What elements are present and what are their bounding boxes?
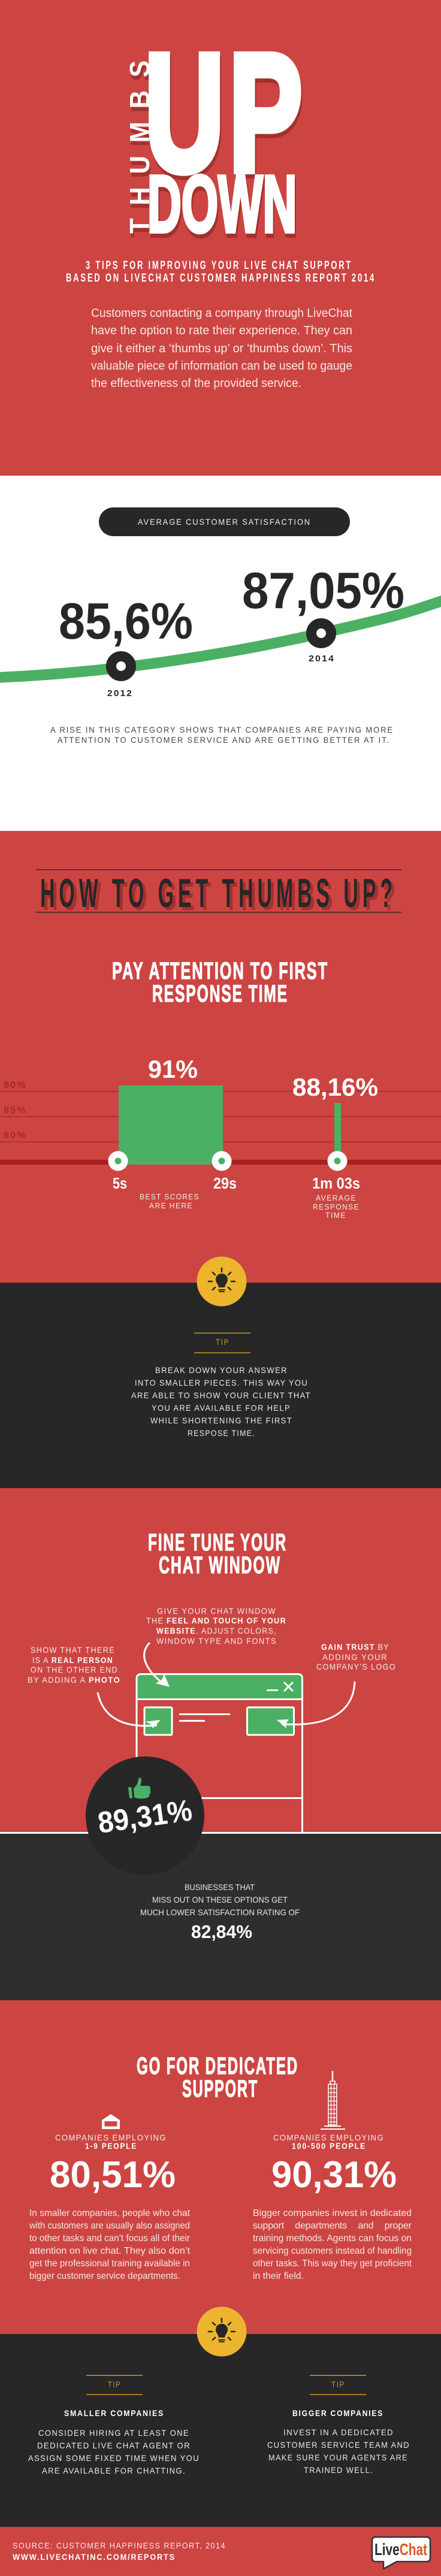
description: In smaller companies, people who chat — [29, 2208, 191, 2218]
callout: gain trust: GAIN TRUST BY — [321, 1642, 389, 1652]
tip text — [267, 2427, 410, 2475]
callout: gain trust: COMPANY’S LOGO — [316, 1662, 396, 1671]
description: bigger customer service departments. — [29, 2271, 180, 2281]
note text: BUSINESSES THAT — [185, 1882, 255, 1892]
section heading — [148, 1529, 287, 1579]
note text — [140, 1882, 300, 1917]
description — [29, 2208, 191, 2281]
note text: MISS OUT ON THESE OPTIONS GET — [152, 1895, 288, 1904]
bar: average response — [334, 1103, 341, 1158]
time labels — [113, 1174, 360, 1192]
caption: best scores: ARE HERE — [149, 1201, 193, 1210]
subtitle — [66, 259, 376, 285]
callout: feel and touch: WINDOW TYPE AND FONTS — [156, 1636, 277, 1646]
description: other tasks. This way they get proficient — [253, 2258, 412, 2269]
tip text: DEDICATED LIVE CHAT AGENT OR — [37, 2441, 191, 2450]
title: thumbs up down: UP — [145, 19, 302, 205]
tip text — [28, 2428, 200, 2475]
tip text: INTO SMALLER PIECES. THIS WAY YOU — [135, 1378, 308, 1387]
tip label: TIP — [108, 2380, 121, 2389]
panel: dedicated support — [0, 2000, 441, 2334]
title: thumbs up down: THUMBS — [124, 47, 155, 234]
column label: 1-9 PEOPLE — [85, 2141, 137, 2151]
value: 89,31% — [96, 1793, 194, 1840]
description — [253, 2208, 412, 2281]
description: training methods. Agents can focus on — [253, 2233, 412, 2244]
source text: WWW.LIVECHATINC.COM/REPORTS — [13, 2552, 176, 2562]
intro text: have the option to rate their experience. They can — [91, 324, 352, 337]
icon: thumbs up — [128, 1777, 150, 1798]
panel: fine tune chat window — [0, 1488, 441, 1833]
tip text: RESPOSE TIME. — [188, 1428, 255, 1438]
intro text — [91, 307, 352, 390]
axis scale: 90% — [4, 1080, 27, 1090]
callout: gain trust: ADDING YOUR — [322, 1652, 388, 1662]
chat window illustration — [137, 1674, 303, 1832]
bar chart — [0, 1055, 441, 1220]
tip: bigger companies — [267, 2375, 410, 2475]
callout: real person: SHOW THAT THERE — [31, 1645, 115, 1655]
caption: average response time — [313, 1193, 360, 1220]
value 82,84%: 82,84% — [191, 1921, 252, 1942]
description: servicing customers instead of handling — [253, 2246, 412, 2256]
source text — [13, 2541, 226, 2562]
description: Bigger companies invest in dedicated — [253, 2208, 412, 2218]
panel: header — [0, 0, 441, 476]
callout: feel and touch — [146, 1606, 286, 1646]
icon: skyscraper — [321, 2071, 345, 2129]
callout: feel and touch: GIVE YOUR CHAT WINDOW — [157, 1606, 276, 1616]
arrow: to photo — [98, 1692, 161, 1728]
panel: average customer satisfaction — [0, 476, 441, 831]
panel: tips for company size — [0, 2306, 441, 2527]
tip text: CUSTOMER SERVICE TEAM AND — [267, 2440, 410, 2450]
column: smaller companies — [29, 2133, 191, 2281]
tip heading: SMALLER COMPANIES — [64, 2408, 164, 2418]
value: 80,51% — [50, 2154, 176, 2196]
marker dots — [111, 1154, 344, 1168]
axis scale — [0, 1080, 441, 1165]
tip label: TIP — [216, 1337, 229, 1347]
marker 2012: 2012 — [107, 688, 133, 699]
callout: feel and touch: WEBSITE. ADJUST COLORS, — [156, 1626, 277, 1635]
caption: best scores: BEST SCORES — [140, 1192, 200, 1201]
description: with customers are usually also assigned — [29, 2221, 190, 2231]
intro text: valuable piece of information can be used to gauge — [91, 359, 352, 373]
tip text — [131, 1365, 311, 1438]
tip text: INVEST IN A DEDICATED — [283, 2427, 394, 2437]
time labels: 5s — [113, 1174, 127, 1192]
section heading: CHAT WINDOW — [159, 1552, 281, 1579]
column label — [55, 2133, 167, 2151]
callout: real person: IS A REAL PERSON — [32, 1655, 113, 1665]
value 91%: 91% — [148, 1055, 198, 1083]
callout: real person — [28, 1645, 120, 1685]
tip text: YOU ARE AVAILABLE FOR HELP — [152, 1403, 291, 1413]
tip text: CONSIDER HIRING AT LEAST ONE — [38, 2428, 189, 2438]
logo: LiveChat: LiveChat — [374, 2540, 427, 2559]
section heading — [137, 2053, 298, 2102]
column label: COMPANIES EMPLOYING — [273, 2133, 384, 2142]
tip text: ARE AVAILABLE FOR CHATTING. — [42, 2466, 186, 2475]
marker 2012 — [107, 657, 133, 699]
intro text: give it either a ‘thumbs up’ or ‘thumbs down’. This — [91, 342, 352, 355]
pill heading: AVERAGE CUSTOMER SATISFACTION — [138, 517, 311, 527]
caption: average response time: AVERAGE — [316, 1193, 357, 1202]
value 2014: 87,05% — [242, 563, 404, 619]
column label — [273, 2133, 384, 2151]
tip label — [86, 2375, 143, 2395]
description: to other tasks and can’t focus all of their — [29, 2233, 191, 2244]
bar: best scores — [119, 1086, 223, 1165]
column label: 100-500 PEOPLE — [292, 2141, 366, 2151]
subheading: RESPONSE TIME — [152, 981, 288, 1007]
message lines — [179, 1689, 278, 1722]
panel: footer — [0, 2527, 441, 2576]
satisfaction note: A RISE IN THIS CATEGORY SHOWS THAT COMPANIES ARE PAYING MORE — [50, 725, 394, 734]
intro text: the effectiveness of the provided service. — [91, 377, 301, 390]
marker 2014 — [309, 623, 335, 664]
source text: SOURCE: CUSTOMER HAPPINESS REPORT, 2014 — [13, 2541, 226, 2550]
tip heading: BIGGER COMPANIES — [292, 2408, 383, 2418]
intro text: Customers contacting a company through LiveChat — [91, 307, 352, 320]
arrow: to title bar — [144, 1643, 170, 1687]
tip text: ARE ABLE TO SHOW YOUR CLIENT THAT — [131, 1390, 311, 1400]
tip label — [310, 2375, 366, 2395]
icon: small house — [102, 2114, 120, 2129]
caption: best scores — [140, 1192, 200, 1210]
value 2012: 85,6% — [59, 593, 193, 650]
panel: tip one — [0, 1257, 441, 1488]
marker 2014: 2014 — [309, 654, 335, 664]
caption: average response time: TIME — [325, 1211, 346, 1220]
icon: light bulb — [197, 1257, 247, 1306]
section heading: GO FOR DEDICATED — [137, 2053, 298, 2079]
callout: real person: BY ADDING A PHOTO — [28, 1675, 120, 1685]
tip text: MAKE SURE YOUR AGENTS ARE — [268, 2453, 408, 2462]
arrow: to logo — [277, 1682, 355, 1728]
panel: first response time — [0, 831, 441, 1283]
tip: smaller companies — [28, 2375, 200, 2475]
photo box — [144, 1707, 172, 1735]
window controls — [284, 1682, 293, 1691]
tip text: TRAINED WELL. — [304, 2465, 373, 2475]
tip label — [194, 1332, 250, 1353]
axis scale: 80% — [4, 1130, 27, 1141]
tip text: ASSIGN SOME FIXED TIME WHEN YOU — [28, 2453, 200, 2463]
description: get the professional training available in — [29, 2258, 190, 2269]
panel: lower satisfaction — [0, 1756, 441, 2000]
section heading: FINE TUNE YOUR — [148, 1529, 287, 1556]
tip label: TIP — [331, 2380, 345, 2389]
subheading — [112, 958, 328, 1007]
icon: light bulb — [197, 2306, 247, 2357]
title: thumbs up down: DOWN — [147, 159, 297, 249]
description: attention on live chat. They also don’t — [29, 2246, 191, 2256]
satisfaction note: ATTENTION TO CUSTOMER SERVICE AND ARE GETTING BETTER AT IT. — [58, 735, 390, 745]
callout: real person: ON THE OTHER END — [31, 1665, 118, 1674]
caption: average response time: RESPONSE — [313, 1202, 360, 1211]
badge: 89,31% — [86, 1756, 204, 1875]
time labels: 29s — [213, 1174, 237, 1192]
tip text: BREAK DOWN YOUR ANSWER — [155, 1365, 288, 1375]
note text: MUCH LOWER SATISFACTION RATING OF — [140, 1907, 300, 1917]
callout: feel and touch: THE FEEL AND TOUCH OF YOUR — [146, 1616, 286, 1625]
section heading: SUPPORT — [182, 2076, 258, 2102]
value 88,16%: 88,16% — [292, 1073, 378, 1101]
time labels: 1m 03s — [312, 1174, 360, 1192]
description: support departments and proper — [253, 2221, 412, 2231]
value: 90,31% — [271, 2154, 397, 2196]
axis scale: 85% — [4, 1105, 27, 1115]
logo box — [247, 1707, 294, 1735]
satisfaction note — [50, 725, 394, 745]
logo: LiveChat — [372, 2537, 430, 2569]
column: bigger companies — [253, 2133, 412, 2281]
line chart — [0, 563, 441, 699]
pill heading — [99, 507, 350, 536]
callout: gain trust — [316, 1642, 396, 1671]
description: in their field. — [253, 2271, 304, 2281]
column label: COMPANIES EMPLOYING — [55, 2133, 167, 2142]
tip text: WHILE SHORTENING THE FIRST — [150, 1416, 292, 1425]
